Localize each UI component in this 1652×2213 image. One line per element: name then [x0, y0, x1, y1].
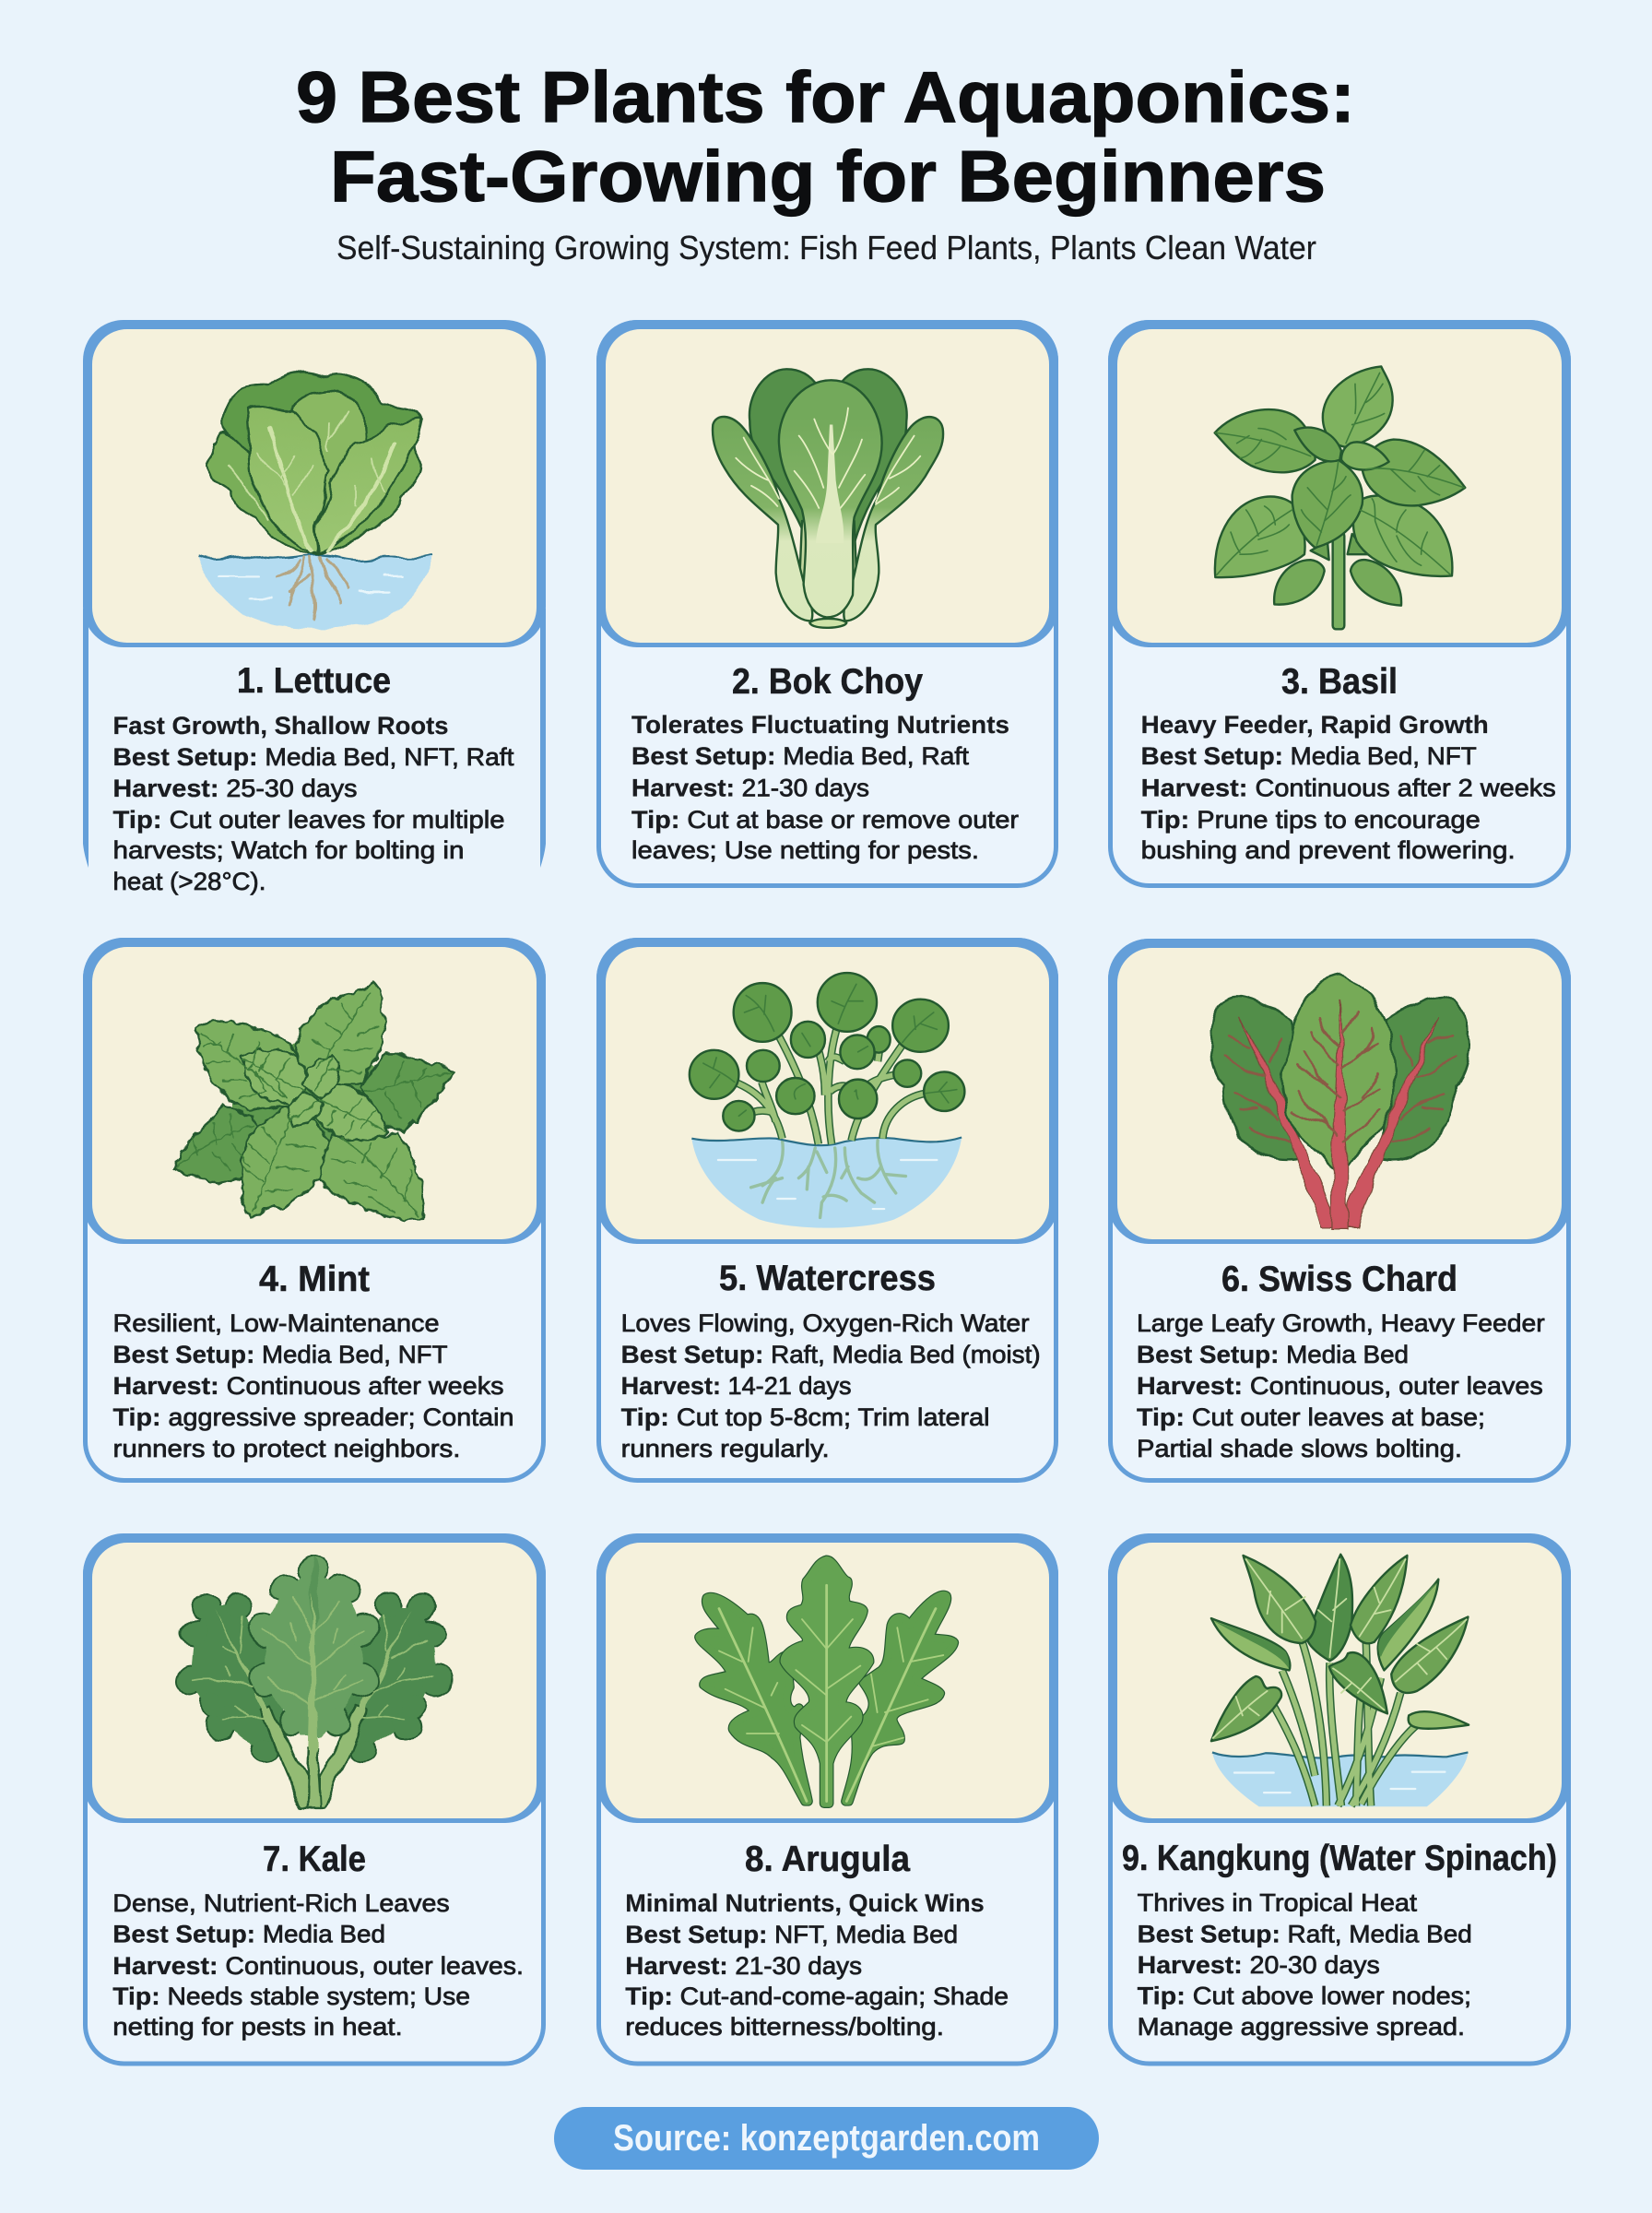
name: 2. Bok Choy	[732, 662, 923, 702]
source pill	[554, 2107, 1099, 2170]
details: Large Leafy Growth, Heavy Feeder	[1137, 1309, 1545, 1337]
details: Loves Flowing, Oxygen-Rich Water	[621, 1309, 1030, 1337]
panel: watercress	[596, 938, 1058, 1481]
panel: arugula	[596, 1533, 1058, 2064]
details: bushing and prevent flowering.	[1141, 836, 1516, 864]
details: Resilient, Low-Maintenance	[112, 1309, 439, 1337]
name: 6. Swiss Chard	[1221, 1260, 1457, 1299]
illustration: bok choy	[713, 369, 943, 628]
details: Tip: Needs stable system; Use	[112, 1982, 470, 2010]
details	[1138, 1889, 1472, 2041]
details: netting for pests in heat.	[112, 2013, 403, 2041]
panel: swiss chard	[1108, 939, 1571, 1481]
details: reduces bitterness/bolting.	[625, 2013, 944, 2041]
details: Harvest: 25-30 days	[112, 775, 358, 802]
details: Thrives in Tropical Heat	[1138, 1889, 1418, 1917]
details: Harvest: Continuous after 2 weeks	[1141, 775, 1556, 802]
name: 9. Kangkung (Water Spinach)	[1122, 1839, 1557, 1878]
illustration: basil sprig	[1215, 366, 1465, 629]
details	[631, 711, 1019, 864]
card frame	[83, 938, 546, 1481]
card frame	[1108, 1533, 1571, 2064]
details: Harvest: Continuous after weeks	[112, 1372, 503, 1400]
details	[621, 1309, 1041, 1462]
panel: kale	[83, 1533, 546, 2064]
details	[112, 712, 514, 895]
panel: bok choy	[596, 320, 1058, 885]
panel: mint	[83, 938, 546, 1481]
name: 8. Arugula	[745, 1840, 910, 1879]
details: Best Setup: Raft, Media Bed	[1138, 1920, 1472, 1947]
card frame	[83, 320, 546, 868]
panel: basil	[1108, 320, 1571, 885]
details	[625, 1889, 1009, 2041]
illustration: lettuce with roots in water	[197, 372, 433, 629]
card frame	[596, 938, 1058, 1481]
details: Tip: Cut-and-come-again; Shade	[625, 1982, 1009, 2010]
card frame	[1108, 939, 1571, 1481]
details	[1141, 711, 1556, 864]
details: Partial shade slows bolting.	[1137, 1435, 1462, 1462]
details: harvests; Watch for bolting in	[112, 836, 465, 864]
card frame	[1108, 320, 1571, 885]
details: Tip: Cut outer leaves at base;	[1137, 1403, 1485, 1431]
illustration: arugula	[699, 1560, 954, 1804]
details: Best Setup: Media Bed, Raft	[631, 742, 970, 770]
details: Harvest: Continuous, outer leaves	[1137, 1372, 1543, 1400]
details	[112, 1889, 524, 2041]
illustration: watercress in water	[690, 973, 964, 1228]
details: Manage aggressive spread.	[1138, 2013, 1465, 2041]
illustration: mint	[175, 982, 454, 1221]
name: 5. Watercress	[719, 1259, 936, 1298]
card frame	[596, 320, 1058, 885]
details: Harvest: 20-30 days	[1138, 1951, 1380, 1979]
card frame	[596, 1533, 1058, 2064]
illustration: swiss chard	[1211, 975, 1469, 1229]
subtitle: Self-Sustaining Growing System: Fish Feed Plants, Plants Clean Water	[336, 229, 1316, 266]
details: Best Setup: Media Bed	[112, 1920, 385, 1947]
title: Fast-Growing for Beginners	[330, 136, 1326, 217]
details: Heavy Feeder, Rapid Growth	[1141, 711, 1489, 739]
details: Tip: Prune tips to encourage	[1141, 806, 1481, 834]
details: Best Setup: Raft, Media Bed (moist)	[621, 1341, 1041, 1368]
details: Harvest: 14-21 days	[621, 1372, 852, 1400]
illustration: kale	[176, 1556, 451, 1805]
details: Dense, Nutrient-Rich Leaves	[112, 1889, 450, 1917]
details: runners to protect neighbors.	[112, 1435, 461, 1462]
details: Minimal Nutrients, Quick Wins	[625, 1889, 985, 1917]
details: Tip: Cut above lower nodes;	[1138, 1982, 1471, 2010]
details: Best Setup: Media Bed, NFT	[1141, 742, 1477, 770]
source pill: Source: konzeptgarden.com	[613, 2118, 1040, 2159]
details: Harvest: Continuous, outer leaves.	[112, 1952, 524, 1980]
details: Best Setup: Media Bed, NFT	[112, 1341, 448, 1368]
name: 3. Basil	[1281, 662, 1398, 702]
illustration: kangkung in water	[1211, 1555, 1469, 1806]
details: Fast Growth, Shallow Roots	[112, 712, 448, 740]
details: Harvest: 21-30 days	[625, 1952, 862, 1980]
card frame	[83, 1533, 546, 2064]
title	[296, 56, 1355, 217]
name: 7. Kale	[263, 1840, 366, 1879]
details	[112, 1309, 514, 1462]
details: heat (>28°C).	[112, 868, 266, 895]
details: Tip: aggressive spreader; Contain	[112, 1403, 514, 1431]
details: runners regularly.	[621, 1435, 830, 1462]
details: Harvest: 21-30 days	[631, 775, 869, 802]
details	[1137, 1309, 1545, 1462]
title: 9 Best Plants for Aquaponics:	[296, 56, 1355, 137]
details: Best Setup: Media Bed, NFT, Raft	[112, 743, 514, 771]
panel: kangkung	[1108, 1533, 1571, 2064]
panel: lettuce	[83, 320, 546, 895]
details: Best Setup: Media Bed	[1137, 1341, 1409, 1368]
details: Tip: Cut at base or remove outer	[631, 806, 1019, 834]
details: Tip: Cut outer leaves for multiple	[112, 806, 505, 834]
details: Tolerates Fluctuating Nutrients	[631, 711, 1009, 739]
name: 1. Lettuce	[237, 661, 391, 701]
details: Best Setup: NFT, Media Bed	[625, 1921, 958, 1948]
name: 4. Mint	[259, 1260, 370, 1299]
details: Tip: Cut top 5-8cm; Trim lateral	[621, 1403, 990, 1431]
details: leaves; Use netting for pests.	[631, 836, 979, 864]
